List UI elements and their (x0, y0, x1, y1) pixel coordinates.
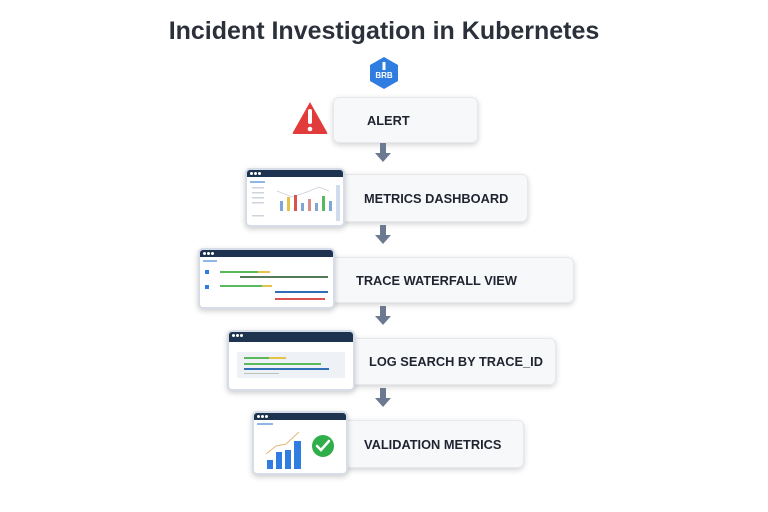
step: metrics dashboard (340, 174, 528, 222)
icon: logo hexagon (370, 57, 398, 89)
step: alert: ALERT (367, 113, 410, 128)
arrow 1 (375, 143, 391, 162)
title: Incident Investigation in Kubernetes (169, 17, 599, 45)
icon: logo hexagon: BRB (375, 71, 393, 80)
step: validation metrics (340, 420, 524, 468)
step: validation metrics: VALIDATION METRICS (364, 437, 501, 452)
step: trace waterfall: TRACE WATERFALL VIEW (356, 273, 517, 288)
arrow 3 (375, 306, 391, 325)
step: metrics dashboard: METRICS DASHBOARD (364, 191, 508, 206)
screenshot: metrics (245, 168, 345, 227)
step: log search: LOG SEARCH BY TRACE_ID (369, 354, 543, 369)
screenshot: logs (227, 330, 355, 391)
icon: warning triangle (292, 102, 328, 134)
step: trace waterfall (330, 257, 574, 303)
arrow 4 (375, 388, 391, 407)
arrow 2 (375, 225, 391, 244)
step: alert (333, 97, 478, 143)
screenshot: validation (252, 411, 348, 475)
screenshot: trace (198, 248, 335, 309)
step: log search (345, 338, 556, 385)
